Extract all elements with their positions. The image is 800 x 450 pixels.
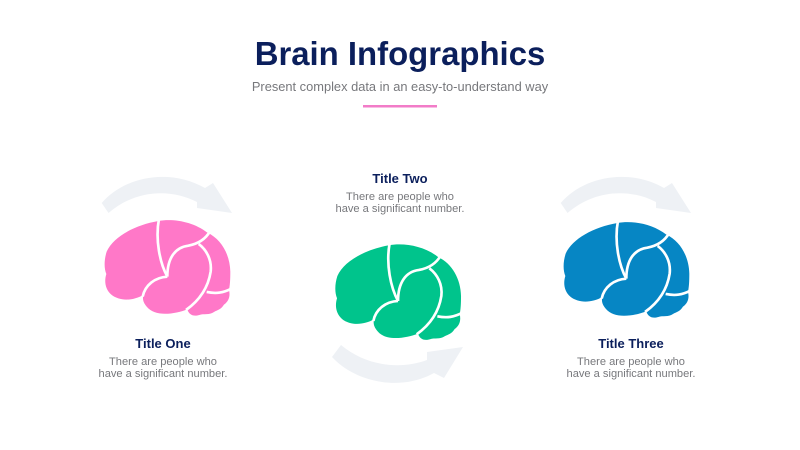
- description: title three: [567, 356, 695, 380]
- description: title one: There are people who: [109, 356, 217, 368]
- description: title one: [99, 356, 227, 380]
- arrow: bottom centre: [332, 345, 463, 383]
- title: Brain Infographics: [255, 35, 545, 72]
- description: title three: have a significant number.: [567, 368, 695, 380]
- heading: title three: Title Three: [598, 336, 664, 351]
- subtitle: Present complex data in an easy-to-understand way: [252, 79, 548, 94]
- brain: pink: [105, 219, 231, 316]
- accent divider: [363, 105, 437, 108]
- arrow: top right: [561, 177, 691, 213]
- brain: green: [335, 243, 462, 340]
- heading: title one: Title One: [135, 336, 191, 351]
- description: title two: have a significant number.: [336, 203, 464, 215]
- text block: title one: [99, 336, 227, 380]
- description: title three: There are people who: [577, 356, 685, 368]
- text block: title three: [567, 336, 695, 380]
- heading: title two: Title Two: [372, 171, 428, 186]
- text block: title two: [336, 171, 464, 215]
- description: title two: [336, 190, 464, 215]
- arrow: top left: [102, 177, 232, 213]
- description: title one: have a significant number.: [99, 368, 227, 380]
- brain: blue: [564, 221, 690, 318]
- description: title two: There are people who: [346, 190, 454, 202]
